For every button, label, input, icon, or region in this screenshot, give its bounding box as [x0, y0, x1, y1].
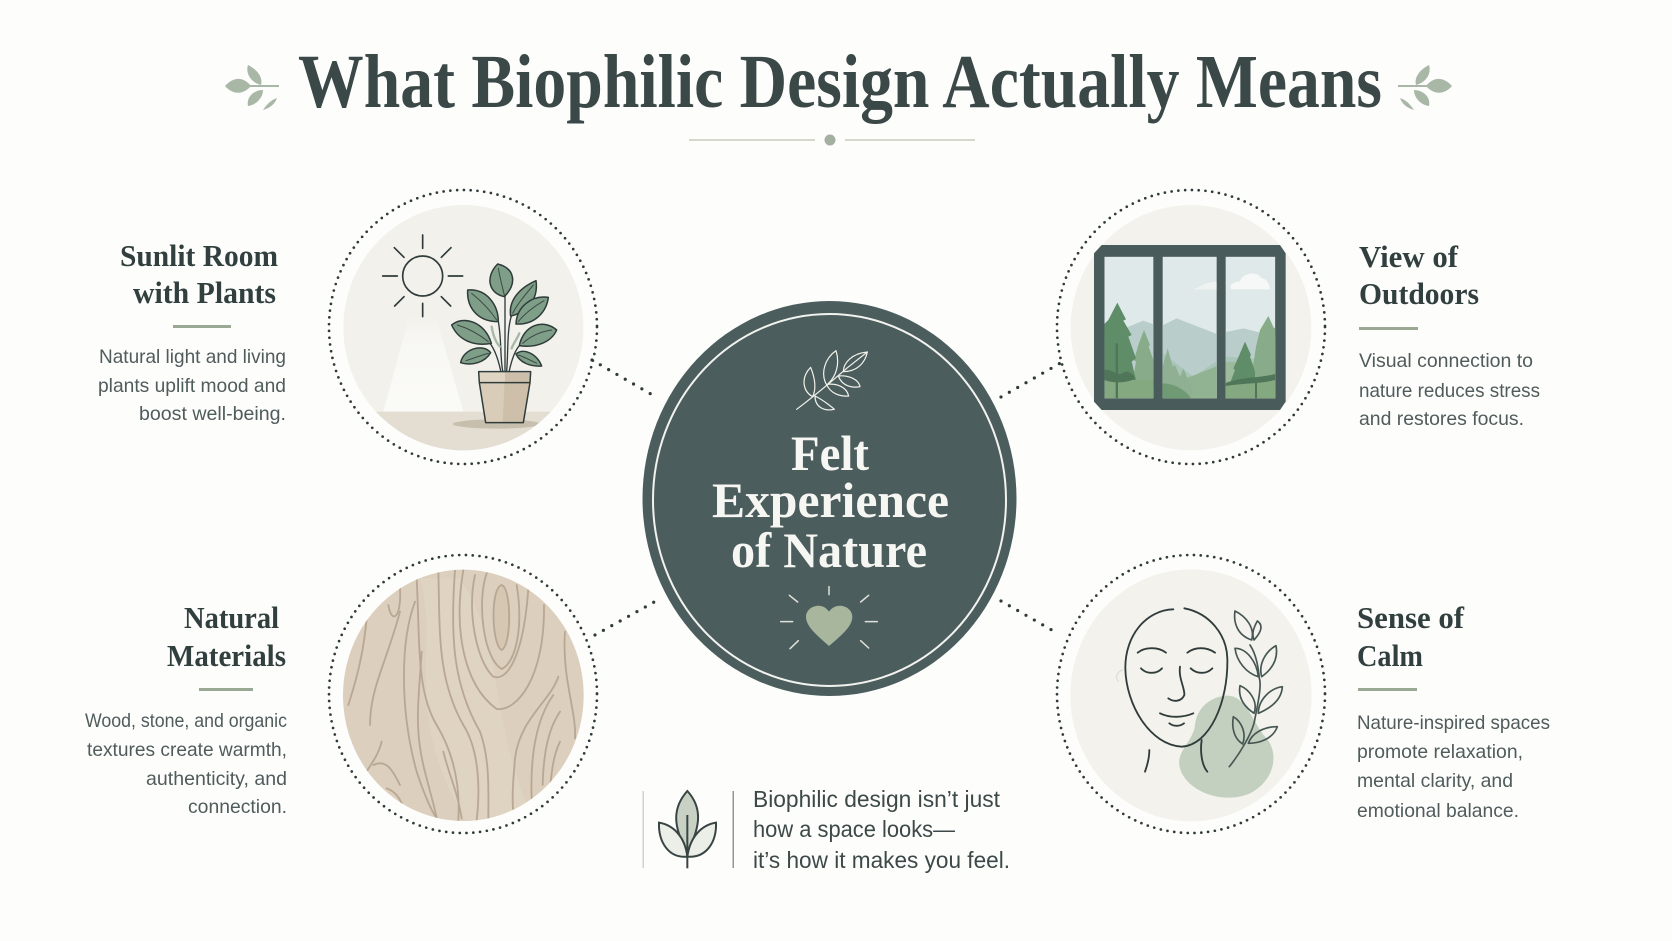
- callout text: Biophilic design isn’t just: [753, 786, 1000, 812]
- description: nature reduces stress: [1359, 380, 1540, 402]
- accent rule: [1359, 327, 1418, 330]
- description: promote relaxation,: [1357, 741, 1523, 763]
- title: What Biophilic Design Actually Means: [298, 40, 1382, 124]
- panel: view of outdoors: [1057, 190, 1540, 464]
- heading: Sunlit Room: [120, 239, 278, 273]
- description: [1359, 350, 1540, 430]
- heading: with Plants: [133, 276, 276, 310]
- icon: three-petal leaf: [659, 791, 716, 868]
- description: [85, 710, 287, 818]
- description: Natural light and living: [99, 346, 286, 368]
- inner ring: [653, 314, 1006, 686]
- description: mental clarity, and: [1357, 770, 1513, 792]
- illustration: window with forest view: [1071, 205, 1311, 450]
- heading: [120, 239, 278, 310]
- description: Visual connection to: [1359, 350, 1533, 372]
- dotted ring: [1057, 190, 1325, 464]
- central circle: felt experience of nature: [642, 301, 1016, 696]
- callout text: it’s how it makes you feel.: [753, 847, 1010, 873]
- description: [1357, 712, 1550, 822]
- callout text: how a space looks—: [753, 816, 955, 842]
- description: plants uplift mood and: [98, 375, 286, 397]
- accent rule: [1358, 688, 1417, 691]
- heading: Materials: [167, 639, 286, 673]
- icon: right title sprig: [1398, 65, 1452, 110]
- dotted ring: [329, 190, 597, 464]
- connectors: [592, 360, 1064, 635]
- description: authenticity, and: [146, 768, 287, 790]
- description: and restores focus.: [1359, 408, 1524, 430]
- callout: closing statement: [642, 786, 1010, 873]
- illustration: calm face with sprig: [1070, 569, 1312, 821]
- right divider: [732, 791, 734, 868]
- accent rule: [199, 688, 253, 691]
- illustration: sun and potted plant: [340, 205, 587, 455]
- dotted ring: [1057, 555, 1325, 833]
- heading: [167, 601, 286, 673]
- description: Wood, stone, and organic: [85, 710, 287, 732]
- panel: sense of calm: [1057, 555, 1550, 833]
- heading: [1357, 601, 1465, 673]
- panel: sunlit room: [98, 190, 597, 464]
- badge label: Experience: [712, 472, 949, 528]
- description: [98, 346, 286, 425]
- title divider: [689, 134, 975, 146]
- heading: Outdoors: [1359, 277, 1479, 311]
- heading: Sense of: [1357, 601, 1465, 635]
- icon: glowing heart: [781, 587, 877, 649]
- heading: Calm: [1357, 639, 1423, 673]
- heading: Natural: [184, 601, 279, 635]
- description: connection.: [188, 796, 287, 818]
- badge label: [712, 425, 949, 578]
- callout text: [753, 786, 1010, 873]
- badge disc: [642, 301, 1016, 696]
- description: Nature-inspired spaces: [1357, 712, 1550, 734]
- badge label: of Nature: [731, 522, 927, 578]
- dotted ring: [329, 555, 597, 833]
- description: textures create warmth,: [87, 739, 287, 761]
- description: emotional balance.: [1357, 800, 1519, 822]
- badge label: Felt: [791, 425, 869, 481]
- icon: leaf sprig: [797, 351, 867, 410]
- heading: View of: [1359, 240, 1459, 274]
- panel: natural materials: [85, 555, 597, 833]
- heading: [1359, 240, 1479, 311]
- left divider: [642, 791, 644, 868]
- description: boost well-being.: [139, 403, 286, 425]
- icon: left title sprig: [225, 65, 279, 110]
- accent rule: [173, 325, 231, 328]
- illustration: wood grain: [343, 570, 584, 822]
